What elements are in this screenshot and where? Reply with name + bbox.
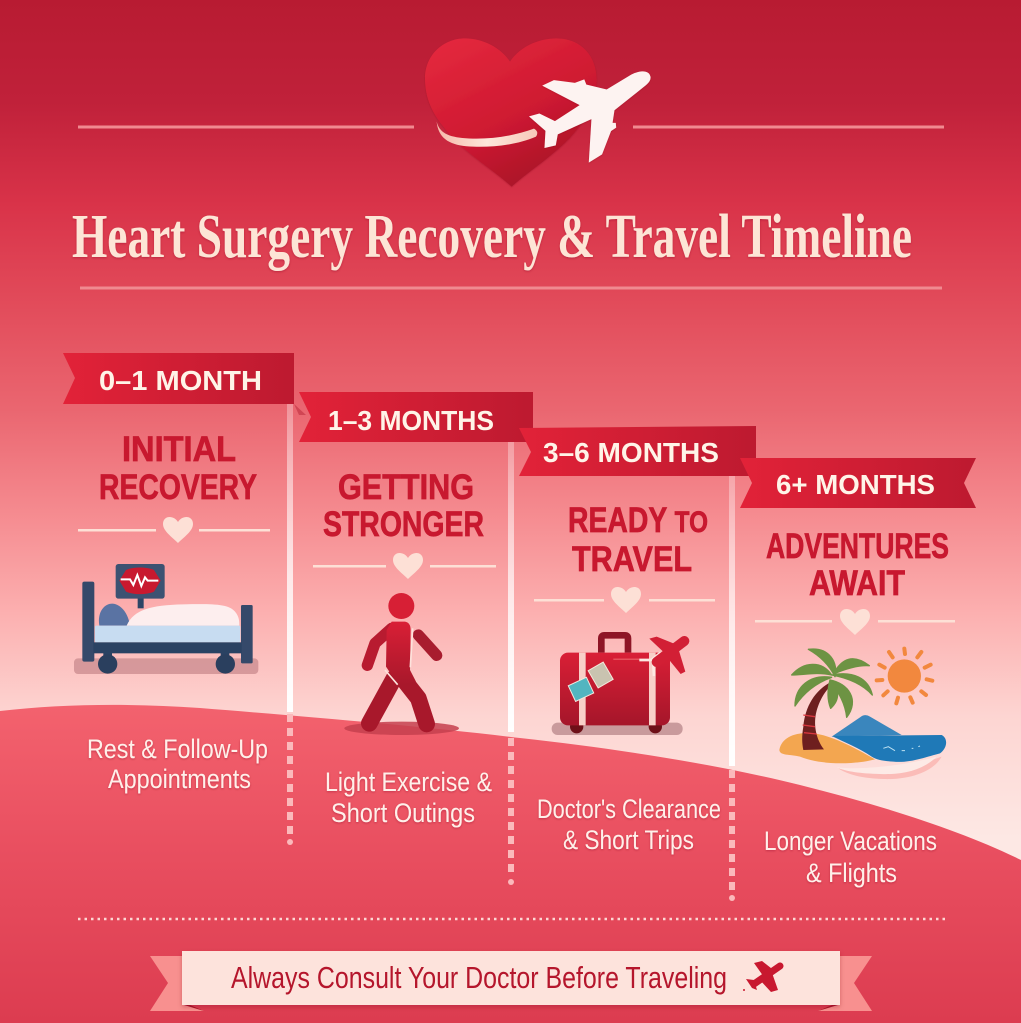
icon: walking person (344, 593, 459, 735)
ribbon: 0-1 month (63, 353, 306, 415)
caption: light exercise: Short Outings (331, 798, 475, 828)
heading: ready to travel (568, 501, 708, 579)
ribbon: 6+ months: 6+ MONTHS (776, 469, 935, 500)
heading: getting stronger: STRONGER (323, 505, 484, 544)
dotted rule (78, 918, 945, 920)
caption: rest and follow-up: Appointments (108, 764, 251, 794)
header rules (78, 126, 944, 290)
ribbon: 3-6 months (519, 426, 756, 476)
heading: getting stronger (323, 468, 484, 544)
caption: rest and follow-up (87, 734, 268, 794)
heart divider (78, 517, 270, 543)
caption: longer vacations: & Flights (806, 858, 897, 888)
caption: longer vacations: Longer Vacations (764, 826, 937, 856)
heading: ready to travel: READY TO (568, 501, 708, 540)
caption: longer vacations (764, 826, 937, 888)
icon: hospital bed (74, 564, 258, 674)
caption: light exercise (325, 767, 492, 828)
heading: getting stronger: GETTING (338, 468, 474, 507)
icon: suitcase with plane (552, 635, 685, 735)
heart divider (313, 553, 496, 579)
icon: heart with airplane (425, 38, 650, 187)
ribbon: 6+ months (740, 458, 976, 508)
caption: doctor's clearance: & Short Trips (563, 825, 694, 855)
heading: adventures await: ADVENTURES (766, 527, 949, 566)
banner body (182, 951, 840, 1005)
heart divider (755, 609, 955, 635)
panel: 6+ months (740, 458, 976, 888)
timeline line 1 (287, 404, 293, 845)
icon: small plane (743, 961, 780, 992)
heading: adventures await (766, 527, 949, 603)
ribbon: 3-6 months: 3–6 MONTHS (543, 437, 719, 468)
caption: doctor's clearance (537, 794, 721, 855)
heart divider (534, 587, 715, 613)
heading: adventures await: AWAIT (809, 564, 905, 603)
icon: palm island and sun (779, 649, 946, 779)
caption: doctor's clearance: Doctor's Clearance (537, 794, 721, 824)
heading: initial recovery: RECOVERY (99, 468, 257, 507)
panel: 0-1 month (63, 353, 306, 794)
ribbon: 1-3 months (299, 392, 533, 442)
panel: 3-6 months (519, 426, 756, 855)
ribbon: 1-3 months: 1–3 MONTHS (328, 405, 494, 436)
caption: light exercise: Light Exercise & (325, 767, 492, 797)
heading: initial recovery (99, 430, 257, 507)
banner tails (150, 956, 872, 1011)
ribbon: 0-1 month: 0–1 MONTH (99, 365, 262, 396)
hill wave (0, 705, 1021, 1023)
timeline line 3 (729, 476, 735, 901)
footer banner (150, 951, 872, 1011)
panel: 1-3 months (299, 392, 533, 828)
timeline line 2 (508, 442, 514, 885)
caption: rest and follow-up: Rest & Follow-Up (87, 734, 268, 764)
heading: ready to travel: TRAVEL (572, 540, 692, 579)
banner text: Always Consult Your Doctor Before Traveling (231, 960, 727, 995)
heading: initial recovery: INITIAL (122, 430, 236, 469)
